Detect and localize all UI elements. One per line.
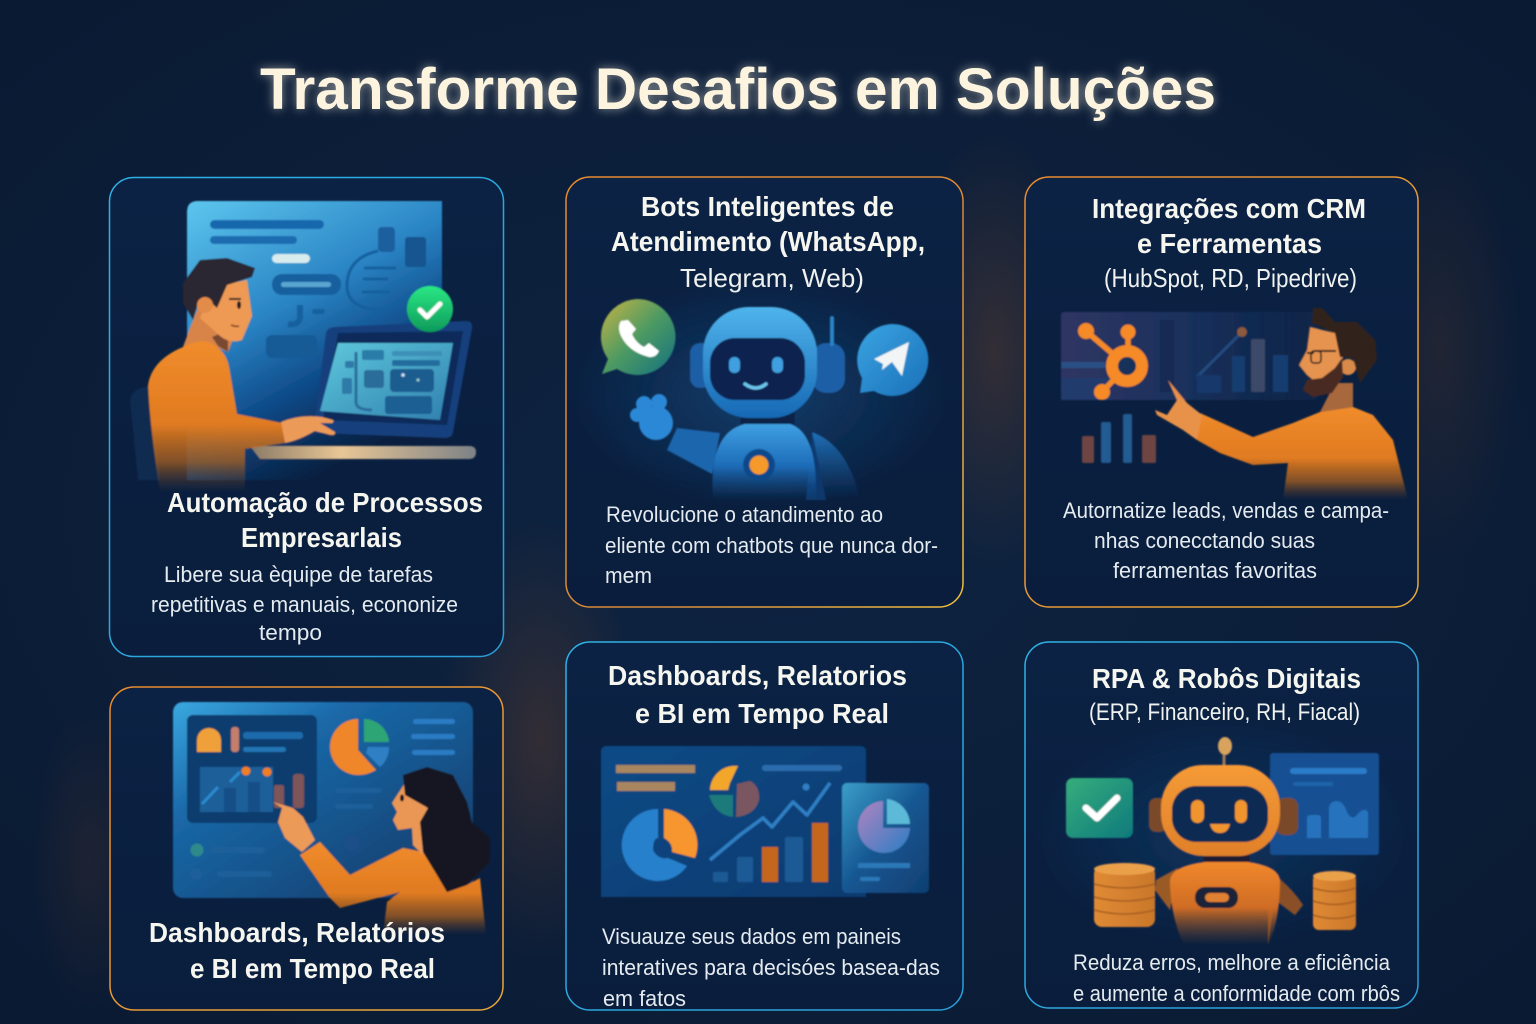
- chart: large pie: [622, 809, 697, 881]
- heading: [149, 917, 445, 984]
- icon: chair: [130, 386, 160, 480]
- description: interatives para decisóes basea-das: [602, 955, 940, 980]
- heading: [611, 191, 925, 293]
- panel: automação de processos: [110, 178, 504, 656]
- heading: Empresarlais: [241, 522, 402, 553]
- description: tempo: [259, 620, 322, 645]
- icon: check square: [1066, 778, 1133, 838]
- heading: Dashboards, Relatórios: [149, 917, 445, 948]
- panel: bots inteligentes: [566, 177, 963, 607]
- heading: [1089, 663, 1361, 726]
- panel: RPA: [1025, 642, 1418, 1008]
- figure: robot: [1149, 737, 1303, 945]
- icon: green check: [407, 286, 453, 332]
- description: mem: [605, 563, 652, 588]
- description: eliente com chatbots que nunca dor-: [605, 533, 938, 558]
- heading: Atendimento (WhatsApp,: [611, 226, 925, 257]
- illustration: woman pointing at dashboard: [173, 702, 490, 935]
- description: [151, 562, 458, 645]
- heading: RPA & Robôs Digitais: [1092, 663, 1361, 694]
- description: e aumente a conformidade com rbôs: [1073, 981, 1400, 1006]
- figure: man: [1155, 308, 1408, 500]
- description: ferramentas favoritas: [1113, 558, 1317, 583]
- chart: small pie: [709, 766, 759, 817]
- heading: [1092, 193, 1366, 293]
- heading: [167, 487, 483, 553]
- description: [1073, 950, 1400, 1006]
- heading: e Ferramentas: [1137, 228, 1322, 259]
- description: em fatos: [603, 986, 686, 1011]
- panel: integrações com CRM: [1025, 177, 1418, 607]
- panel: dashboards center: [566, 642, 963, 1011]
- heading: (HubSpot, RD, Pipedrive): [1104, 263, 1357, 293]
- illustration: man at laptop: [130, 201, 476, 492]
- icon: telegram: [857, 324, 928, 396]
- chart: bars: [713, 823, 828, 882]
- description: [1063, 498, 1389, 583]
- chart: line: [710, 783, 830, 860]
- chart: upper bars: [1197, 327, 1288, 393]
- heading: e BI em Tempo Real: [190, 953, 435, 984]
- panel: chart screen: [1270, 753, 1379, 855]
- heading: e BI em Tempo Real: [635, 698, 889, 729]
- heading: Bots Inteligentes de: [641, 191, 894, 222]
- description: nhas conecctando suas: [1094, 528, 1315, 553]
- heading: Dashboards, Relatorios: [608, 660, 907, 691]
- description: Visuauze seus dados em paineis: [602, 924, 901, 949]
- illustration: man pointing at CRM dashboard: [1061, 308, 1408, 500]
- heading: [608, 660, 907, 729]
- description: repetitivas e manuais, econonize: [151, 592, 458, 617]
- figure: woman: [273, 767, 490, 935]
- chart: lower bars: [1082, 414, 1156, 463]
- figure: robot: [630, 307, 860, 500]
- panel: dashboards left: [110, 687, 503, 1010]
- figure: man: [148, 258, 335, 492]
- icon: hubspot: [1078, 323, 1142, 400]
- description: Autornatize leads, vendas e campa-: [1063, 498, 1389, 523]
- heading: (ERP, Financeiro, RH, Fiacal): [1089, 699, 1360, 726]
- panel: side report: [842, 783, 929, 893]
- heading: Integrações com CRM: [1092, 193, 1366, 224]
- heading: Telegram, Web): [680, 263, 864, 293]
- description: [605, 502, 938, 588]
- illustration: orange robot: [1032, 720, 1412, 950]
- description: Reduza erros, melhore a eficiência: [1073, 950, 1391, 975]
- illustration: robot with chat icons: [570, 280, 950, 510]
- description: Revolucione o atandimento ao: [606, 502, 883, 527]
- icon: desk: [250, 446, 476, 459]
- icon: whatsapp: [601, 299, 675, 375]
- title: Transforme Desafios em Soluções: [260, 57, 1216, 122]
- description: Libere sua èquipe de tarefas: [164, 562, 433, 587]
- icon: left coins: [1094, 863, 1155, 927]
- heading: Automação de Processos: [167, 487, 483, 518]
- illustration: dashboard: [601, 746, 929, 897]
- chart: pie: [330, 719, 389, 775]
- icon: laptop: [314, 321, 472, 438]
- description: [602, 924, 940, 1011]
- icon: right coins: [1313, 871, 1356, 930]
